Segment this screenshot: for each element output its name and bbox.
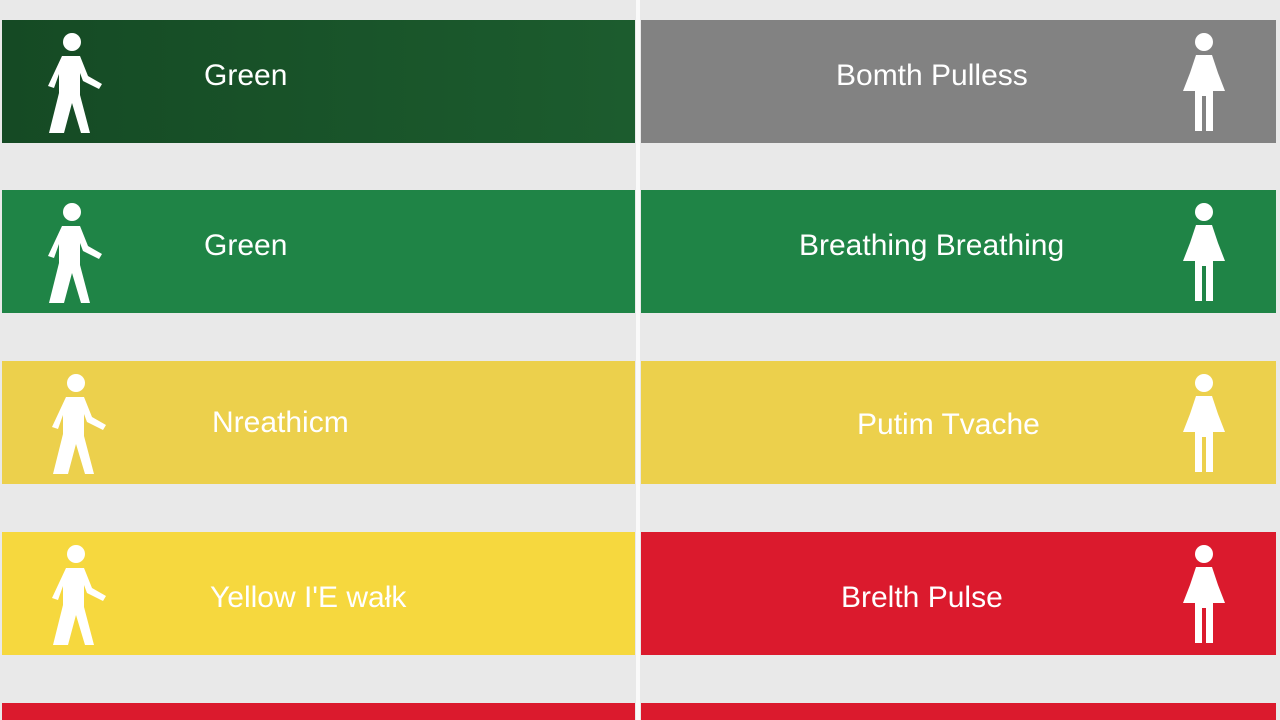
icon: walking man <box>52 545 106 645</box>
text: Brelth Pulse <box>841 581 1003 614</box>
panel: row1 left <box>2 20 635 143</box>
text: Green <box>204 229 287 262</box>
icon: walking man <box>48 33 102 133</box>
icon: walking man <box>52 374 106 474</box>
text: Nreathicm <box>212 406 349 439</box>
icon: walking man <box>48 203 102 303</box>
panel: row3 left <box>2 361 635 484</box>
text: Breathing Breathing <box>799 229 1064 262</box>
panel: row1 right <box>641 20 1276 143</box>
panel: row2 left <box>2 190 635 313</box>
icon: woman <box>1183 203 1225 301</box>
icon: woman <box>1183 33 1225 131</box>
panel: row3 right <box>641 361 1276 484</box>
text: Bomth Pulless <box>836 59 1028 92</box>
panel: row5 left <box>2 703 635 720</box>
panel: row5 right <box>641 703 1276 720</box>
icon: woman <box>1183 545 1225 643</box>
text: Putim Tvache <box>857 408 1040 441</box>
divider <box>636 0 640 720</box>
panel: row4 left <box>2 532 635 655</box>
panel: row2 right <box>641 190 1276 313</box>
text: Yellow I'E wałk <box>210 581 406 614</box>
panel: row4 right <box>641 532 1276 655</box>
icon: woman <box>1183 374 1225 472</box>
text: Green <box>204 59 287 92</box>
